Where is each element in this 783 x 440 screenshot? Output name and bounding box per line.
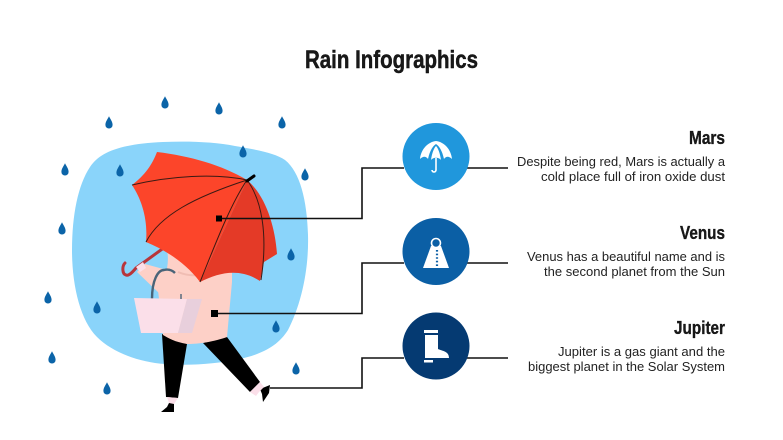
icon: raincoat	[402, 218, 470, 285]
cuff	[136, 262, 146, 272]
legs	[161, 334, 270, 412]
umbrella handle	[123, 247, 165, 275]
text: Jupiter: Jupiter is a gas giant and the	[558, 345, 725, 359]
bag	[134, 298, 187, 333]
bag handle	[152, 270, 175, 299]
coat	[158, 242, 232, 344]
text: Venus: Venus	[680, 223, 725, 243]
connector: Jupiter	[270, 358, 508, 388]
icon: rain boot	[402, 312, 470, 380]
connector: Mars	[216, 168, 508, 222]
connector: Venus	[211, 263, 508, 317]
illustration: person with umbrella in rain	[44, 96, 309, 412]
text: Jupiter: biggest planet in the Solar System	[528, 360, 725, 374]
text: Venus: the second planet from the Sun	[544, 265, 725, 279]
title: Rain Infographics	[305, 46, 478, 74]
icon: umbrella	[402, 123, 470, 190]
arm	[137, 264, 212, 300]
umbrella canopy	[132, 152, 247, 282]
text: Venus	[527, 223, 725, 279]
text: Jupiter: Jupiter	[674, 318, 725, 338]
text: Mars: Mars	[689, 128, 725, 148]
socks	[167, 382, 264, 404]
background blob	[72, 142, 308, 365]
umbrella tip	[247, 176, 254, 181]
text: Mars	[517, 128, 726, 184]
text: Jupiter	[528, 318, 725, 374]
umbrella ribs	[132, 176, 264, 282]
rain drops	[44, 96, 309, 394]
text: Venus: Venus has a beautiful name and is	[527, 250, 725, 264]
text: Mars: Despite being red, Mars is actually a	[517, 155, 725, 169]
text: Mars: cold place full of iron oxide dust	[541, 170, 726, 184]
